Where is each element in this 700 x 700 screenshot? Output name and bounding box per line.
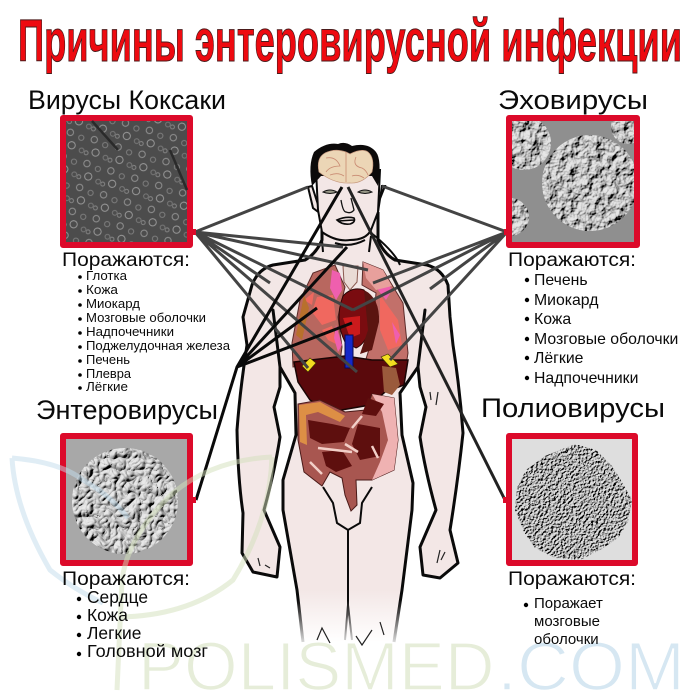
affected list: Enterovirus: Легкие: [87, 623, 141, 643]
right adrenal: [381, 354, 398, 367]
face: [316, 170, 380, 240]
liver and stomach: [294, 356, 408, 412]
brain: [318, 150, 373, 183]
affected list: Coxsackie: Кожа: [86, 282, 119, 297]
affected list: Coxsackie: Поджелудочная железа: [86, 338, 231, 353]
collar lines: [322, 232, 400, 265]
dark loops: [308, 398, 384, 472]
salmon blotches: [304, 292, 402, 350]
affected list: Coxsackie: Плевра: [86, 366, 132, 381]
affected list: Poliovirus: оболочки: [534, 631, 599, 648]
kidney: [382, 366, 400, 395]
affected list: Echovirus: Лёгкие: [534, 350, 584, 367]
connector lines: Echovirus: [353, 186, 507, 360]
brain folds: [326, 152, 368, 182]
connector line: Poliovirus: [348, 187, 505, 500]
affected list: Echovirus: Кожа: [534, 311, 571, 328]
affected list: Coxsackie: Надпочечники: [86, 324, 174, 339]
image: Echovirus: [490, 115, 640, 245]
affected list: Poliovirus: мозговые: [534, 613, 600, 630]
affected list: Enterovirus: Головной мозг: [87, 641, 208, 661]
ears: [308, 186, 385, 214]
affected list: Echovirus: Надпочечники: [534, 370, 638, 387]
nose: [341, 198, 354, 213]
human figure: [237, 212, 463, 645]
affected list: Coxsackie: Глотка: [86, 268, 128, 283]
right lung: [362, 262, 408, 366]
affected list: Enterovirus: Сердце: [87, 587, 148, 607]
affected list: Enterovirus: Поражаются:: [62, 568, 190, 590]
heading: Poliovirus: Полиовирусы: [481, 393, 665, 423]
image: Enterovirus: [63, 436, 190, 563]
connector nubs: [190, 229, 510, 503]
heading: Echovirus: Эховирусы: [498, 85, 648, 115]
intestines: [298, 394, 398, 511]
affected list: Coxsackie: [62, 249, 231, 394]
head: [308, 143, 385, 240]
internal organs: [292, 262, 408, 511]
left adrenal: [302, 358, 316, 372]
torso fill: [283, 212, 413, 642]
image: Poliovirus: [509, 436, 635, 563]
affected list: Echovirus: Поражаются:: [508, 249, 636, 271]
affected list: Enterovirus: Кожа: [87, 605, 128, 625]
affected list: Enterovirus: [62, 568, 208, 661]
affected list: Poliovirus: Поражает: [534, 595, 603, 612]
pink colon: [372, 394, 398, 480]
hand and knee creases: [258, 392, 445, 645]
right half of body: [378, 212, 463, 642]
eyes: [323, 190, 372, 194]
connector lines: Coxsackie: [195, 187, 368, 372]
trachea: [343, 266, 358, 290]
left half of body: [237, 212, 322, 642]
mouth: [337, 217, 354, 224]
affected list: Poliovirus: Поражаются:: [508, 568, 636, 590]
connector lines: Enterovirus: [196, 187, 352, 500]
affected list: Poliovirus: [508, 568, 636, 648]
affected list: Coxsackie: Миокард: [86, 296, 140, 311]
magenta blotches: [330, 270, 400, 352]
affected list: Coxsackie: Печень: [86, 352, 130, 367]
groin and leg divide: [323, 487, 372, 640]
affected list: Echovirus: Мозговые оболочки: [534, 331, 678, 348]
affected list: Echovirus: [508, 249, 678, 387]
affected list: Echovirus: Миокард: [534, 292, 598, 309]
affected list: Coxsackie: Лёгкие: [86, 379, 128, 394]
affected list: Echovirus: Печень: [534, 272, 588, 289]
vena cava: [345, 335, 353, 368]
light loops: [310, 416, 378, 474]
affected list: Coxsackie: Поражаются:: [62, 249, 190, 271]
blue leaf: [12, 458, 128, 603]
orange lung edge: [296, 295, 309, 340]
affected list: Coxsackie: Мозговые оболочки: [86, 310, 206, 325]
heading: Coxsackie: Вирусы Коксаки: [28, 85, 226, 115]
left lung: [292, 265, 345, 367]
watermark logo: [12, 457, 272, 690]
aorta arc: [360, 290, 379, 354]
heart: [339, 289, 371, 348]
heading: Enterovirus: Энтеровирусы: [36, 395, 218, 425]
green leaf with stem: [117, 457, 272, 690]
heart highlight: [343, 316, 360, 338]
hair: [310, 143, 380, 186]
pale lung top: [363, 262, 392, 290]
orange colon: [299, 402, 345, 445]
image: Coxsackie virus: [63, 118, 190, 245]
